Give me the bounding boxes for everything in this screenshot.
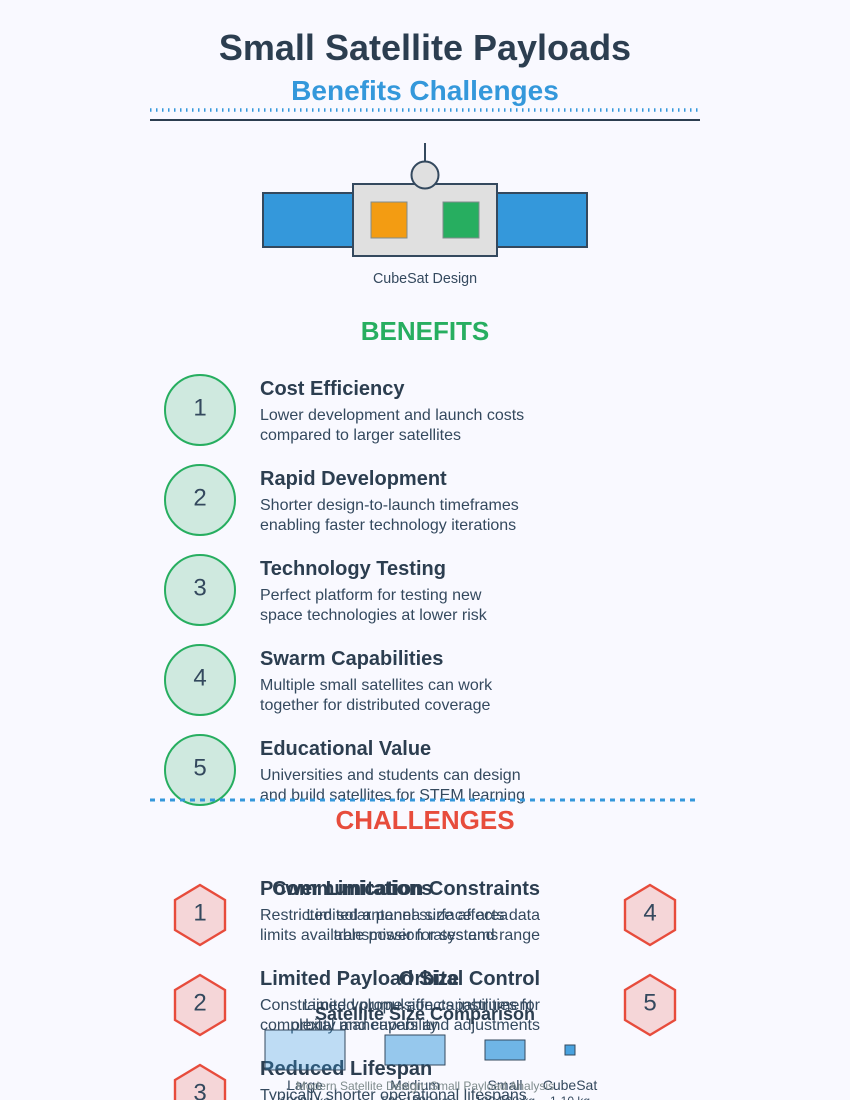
challenge 4: transmission rates and range <box>334 927 540 944</box>
challenge 1: Restricted solar panel surface area <box>260 907 508 924</box>
challenge 2 <box>175 968 533 1035</box>
challenge 2: Constrained volume affects instrument <box>260 997 533 1014</box>
benefit 1: 1 <box>193 394 207 422</box>
challenge 1: Power Limitations <box>260 878 432 900</box>
benefit 3 <box>165 555 488 625</box>
benefit 4: 4 <box>193 664 207 692</box>
chart: satellite size comparison: Large <box>287 1077 323 1093</box>
benefit 3: 3 <box>193 574 207 602</box>
challenge 5: 5 <box>643 990 657 1016</box>
benefit 3: Perfect platform for testing new <box>260 587 482 604</box>
heading: challenges: CHALLENGES <box>335 805 515 835</box>
benefit 3: space technologies at lower risk <box>260 607 488 624</box>
challenge 5 <box>291 968 675 1035</box>
benefit 1: Cost Efficiency <box>260 378 405 400</box>
challenge 1: 1 <box>193 900 207 926</box>
subtitle: Benefits Challenges <box>291 75 559 106</box>
chart: satellite size comparison: CubeSat <box>543 1077 597 1093</box>
benefit 5 <box>165 735 525 805</box>
benefit 5: Universities and students can design <box>260 767 521 784</box>
challenge 2: complexity and capability <box>260 1017 438 1034</box>
challenge 5: orbital maneuvers and adjustments <box>291 1017 540 1034</box>
benefit 5: 5 <box>193 754 207 782</box>
chart: satellite size comparison: Satellite Size Comparison <box>315 1004 535 1024</box>
challenge 1 <box>175 878 508 945</box>
challenge 3 <box>175 1058 527 1100</box>
title: Small Satellite Payloads <box>219 27 631 68</box>
challenge 4: Communication Constraints <box>272 878 540 900</box>
benefit 1: Lower development and launch costs <box>260 407 524 424</box>
footer note: Modern Satellite Design: Small Payload Analysis <box>296 1079 554 1093</box>
benefit 2: enabling faster technology iterations <box>260 517 516 534</box>
challenge 2: 2 <box>193 990 207 1016</box>
challenge 2: Limited Payload Size <box>260 968 459 990</box>
chart: satellite size comparison: Small <box>487 1077 523 1093</box>
challenge 1: limits available power for systems <box>260 927 498 944</box>
chart: satellite size comparison: Medium <box>390 1077 440 1093</box>
benefit 2: Shorter design-to-launch timeframes <box>260 497 519 514</box>
benefit 1: compared to larger satellites <box>260 427 461 444</box>
benefit 4 <box>165 645 493 715</box>
benefit 5: Educational Value <box>260 738 431 760</box>
challenge 4: Limited antenna size affects data <box>306 907 540 924</box>
benefit 3: Technology Testing <box>260 558 446 580</box>
benefit 2 <box>165 465 519 535</box>
challenge 5: Orbital Control <box>399 968 540 990</box>
challenge 4: 4 <box>643 900 657 926</box>
challenge 3: Reduced Lifespan <box>260 1058 432 1080</box>
heading: benefits: BENEFITS <box>361 316 489 346</box>
benefit 2: 2 <box>193 484 207 512</box>
benefit 5: and build satellites for STEM learning <box>260 787 525 804</box>
benefit 2: Rapid Development <box>260 468 447 490</box>
icon: CubeSat satellite <box>263 143 587 256</box>
chart: satellite size comparison <box>265 1004 597 1100</box>
benefit 4: Multiple small satellites can work <box>260 677 493 694</box>
benefit 4: Swarm Capabilities <box>260 648 443 670</box>
benefit 1 <box>165 375 524 445</box>
satellite caption: CubeSat Design <box>373 271 477 287</box>
benefit 4: together for distributed coverage <box>260 697 490 714</box>
challenge 5: Limited propulsion capabilities for <box>303 997 541 1014</box>
challenge 4 <box>272 878 675 945</box>
